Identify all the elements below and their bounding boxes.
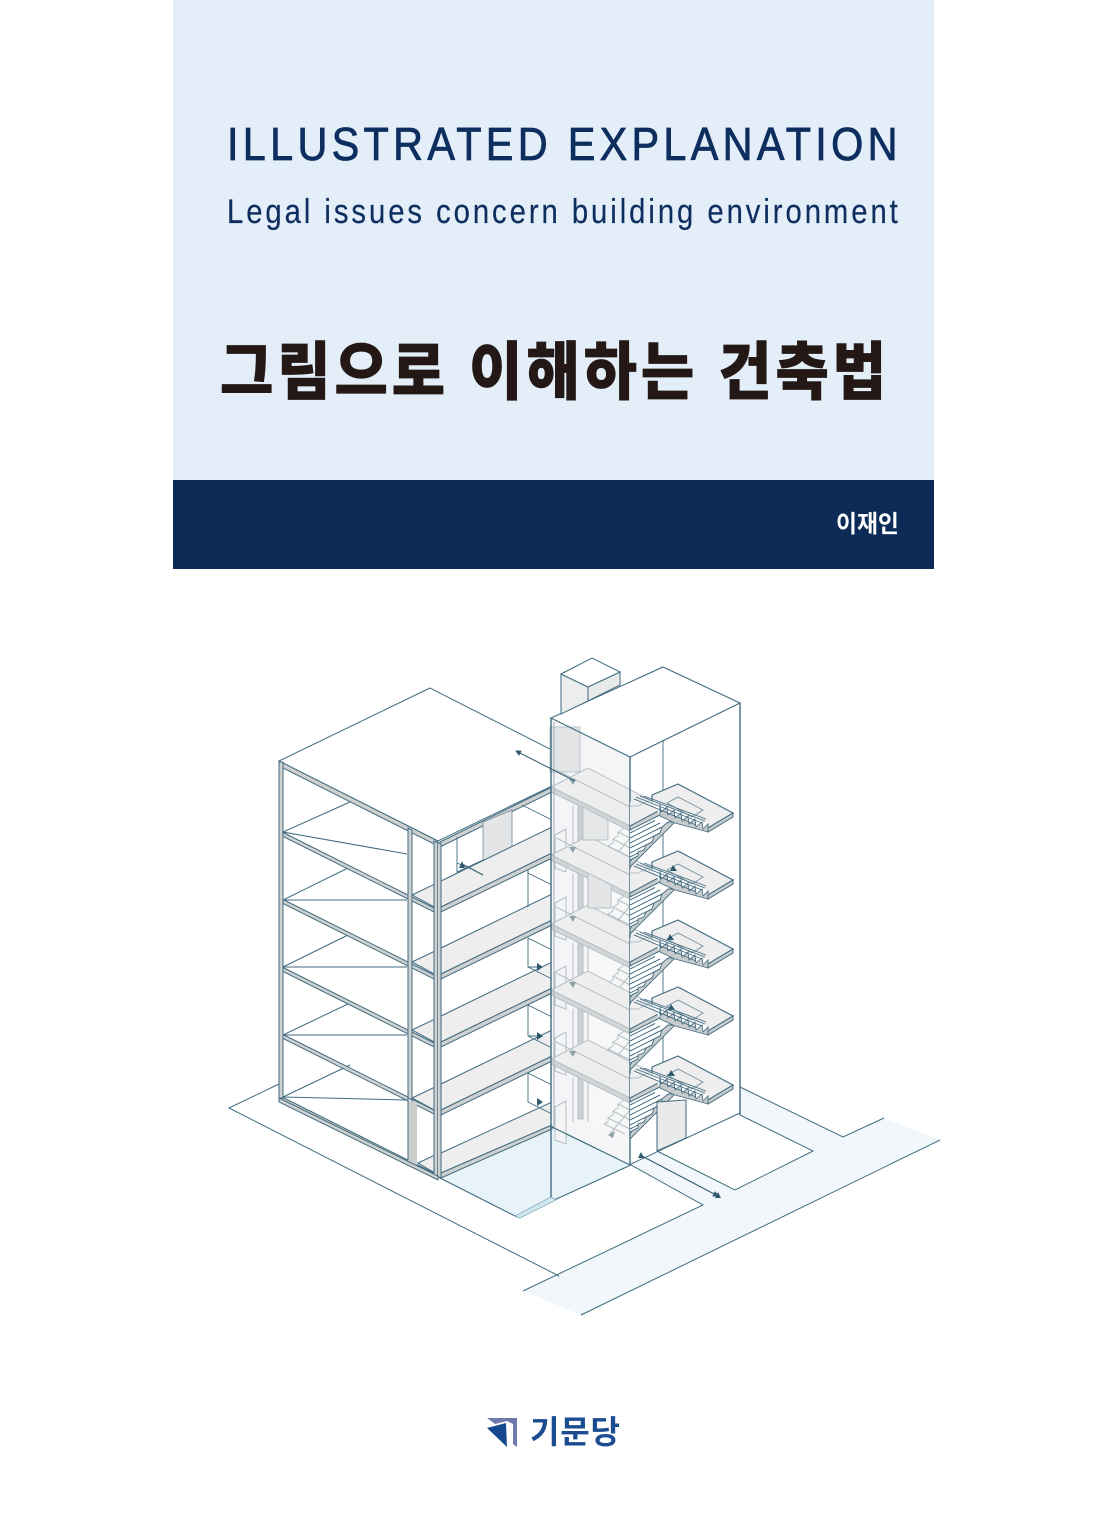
evacuation arrows (459, 751, 721, 1198)
stair core: outer shell (551, 667, 740, 1197)
staircases and landing platforms (630, 784, 733, 1139)
korean title: 그림으로 이해하는 건축법 (220, 337, 886, 408)
english subtitle: Legal issues concern building environment (227, 192, 898, 231)
ground: road and plot (229, 1084, 940, 1315)
ground floor door (657, 1100, 686, 1151)
stair core: elevators and landings behind glass (550, 718, 662, 1165)
left building: side floors (279, 761, 438, 1177)
publisher logo mark (487, 1418, 517, 1447)
publisher name: 기문당 (530, 1414, 620, 1450)
rooftop box (561, 658, 620, 714)
left building: right side floor bands (412, 787, 552, 1178)
left building: roof (279, 688, 552, 841)
left building: columns (279, 762, 441, 1180)
author name: 이재인 (836, 510, 899, 537)
english title: ILLUSTRATED EXPLANATION (227, 119, 898, 171)
building illustration (229, 658, 940, 1315)
top cover panel (173, 0, 934, 480)
author band (173, 480, 934, 569)
